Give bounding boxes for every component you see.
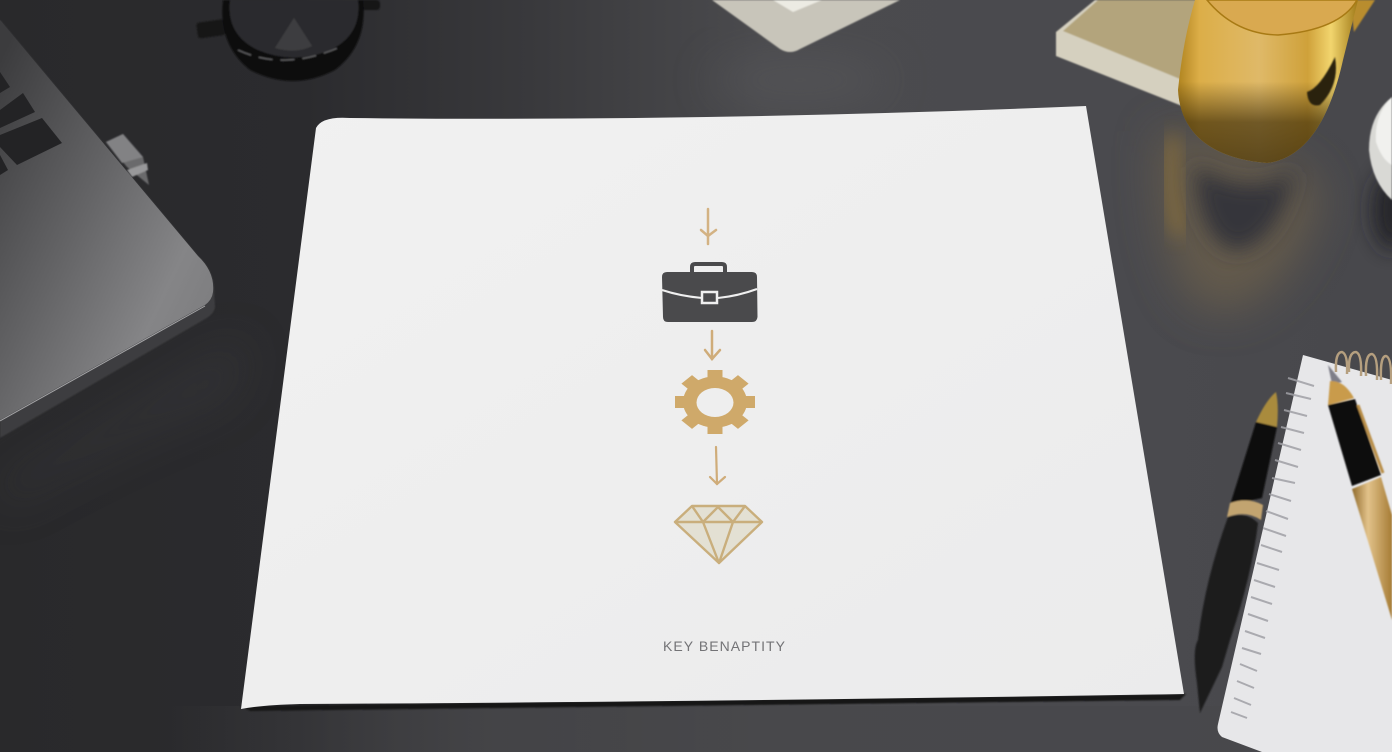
pen tip [1256,392,1278,427]
laptop edge highlight [0,306,205,421]
sheet paper [241,106,1184,709]
white box [712,0,900,52]
arrow 1 [701,209,716,244]
watch [196,0,380,81]
arrow 2 [705,331,720,359]
arrow 3 [710,447,725,484]
gold coaster [1056,0,1375,106]
laptop port connector [106,134,149,185]
cup rim and interior [1207,0,1357,35]
black pen [1195,392,1278,713]
cup highlight [1307,57,1336,105]
pen nib [1328,365,1342,384]
pen gold barrel [1352,477,1392,620]
pen band [1227,500,1263,520]
gold cup [1178,0,1358,163]
laptop lid surface [0,20,213,420]
white plate [1369,97,1392,200]
laptop keys [0,72,62,175]
pen clip [1358,405,1383,473]
pen gold section [1328,381,1354,405]
notepad top spiral [1336,352,1391,384]
pen black barrel [1328,399,1381,486]
label: key benaptity: KEY BENAPTITY [663,638,786,654]
icon: briefcase [662,264,758,322]
notepad page [1218,355,1392,752]
laptop [0,20,215,438]
document sheet [240,106,1186,711]
pen upper barrel [1230,422,1277,505]
gold and black pen [1328,365,1392,620]
spiral notepad [1218,352,1392,752]
notepad left spiral [1231,378,1314,718]
pen lower barrel [1195,515,1258,713]
icon: gear [675,370,755,434]
icon: diamond [675,506,762,563]
